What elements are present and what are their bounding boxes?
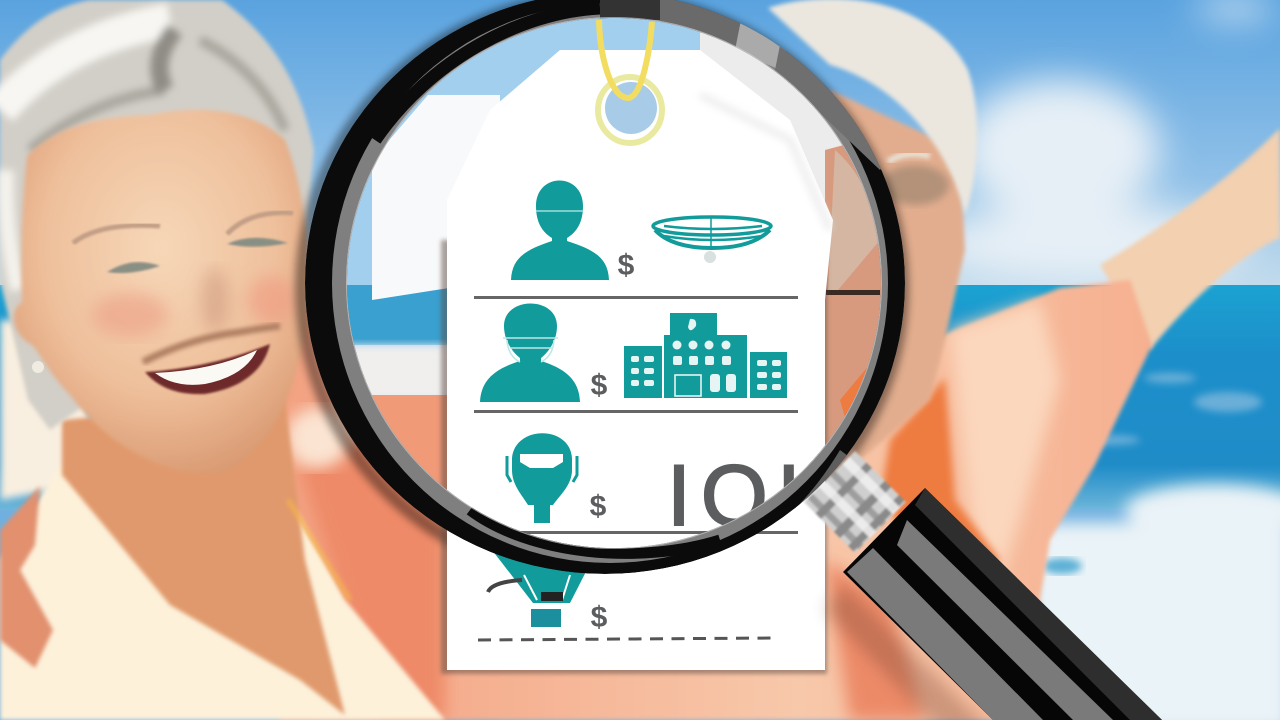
inner grey band <box>332 3 888 563</box>
face shading <box>92 268 296 337</box>
photo: man on right <box>270 0 1280 720</box>
row 3: IOL text: IOL <box>667 448 836 544</box>
woman's smile <box>143 326 280 394</box>
tag fold shading <box>700 95 830 230</box>
handle shadow <box>825 585 990 720</box>
black handle <box>843 488 1162 720</box>
woman's hand <box>0 486 53 668</box>
row 2: dollar: $ <box>591 369 608 402</box>
row 2: hospital icon <box>624 313 787 398</box>
photo: woman on left <box>0 0 445 720</box>
tag hole and string <box>598 20 662 143</box>
dark top-left band <box>375 8 600 140</box>
row 2: masked surgeon icon <box>480 304 580 402</box>
row divider 1 <box>474 296 798 299</box>
man's shirt <box>270 280 1152 720</box>
row 1: dollar: $ <box>618 249 635 282</box>
row 4: dollar: $ <box>591 601 608 634</box>
highlight on lower ring <box>798 450 847 506</box>
row 1: lens implant icon <box>653 217 771 263</box>
metal ferrule <box>804 451 906 553</box>
tag body <box>447 50 833 670</box>
man's head and hair <box>820 90 965 460</box>
row 4: device icon <box>488 550 597 627</box>
man's raised arm <box>1100 128 1280 350</box>
price tag <box>441 20 836 674</box>
woman's neck <box>62 400 345 715</box>
woman's earring <box>32 361 44 373</box>
row 3: anesthesia mask icon <box>507 433 577 523</box>
magnifying lens ring <box>305 0 920 600</box>
lens view background <box>347 18 881 482</box>
row 1: surgeon icon <box>511 180 609 280</box>
inner rim highlight <box>347 18 881 548</box>
hair strands <box>0 20 285 290</box>
lens shadow <box>302 0 902 579</box>
magnifying glass handle <box>804 451 1162 720</box>
man's glasses and brow <box>881 154 949 205</box>
white area behind neck <box>0 320 110 500</box>
top-right segments <box>600 0 881 170</box>
shirt light patch <box>286 408 350 468</box>
tag shadow <box>441 240 827 674</box>
row 3: dollar: $ <box>590 490 607 523</box>
woman's shirt <box>0 462 445 720</box>
dashed total line <box>478 638 776 640</box>
dark bottom band <box>470 510 720 553</box>
woman's eyes and brows <box>73 213 293 273</box>
row divider 2 <box>474 410 798 413</box>
woman's hair <box>0 0 314 430</box>
collar stripe <box>288 500 350 600</box>
outer black ring <box>305 0 905 574</box>
woman's face <box>14 110 308 473</box>
row divider 3 <box>474 531 798 534</box>
